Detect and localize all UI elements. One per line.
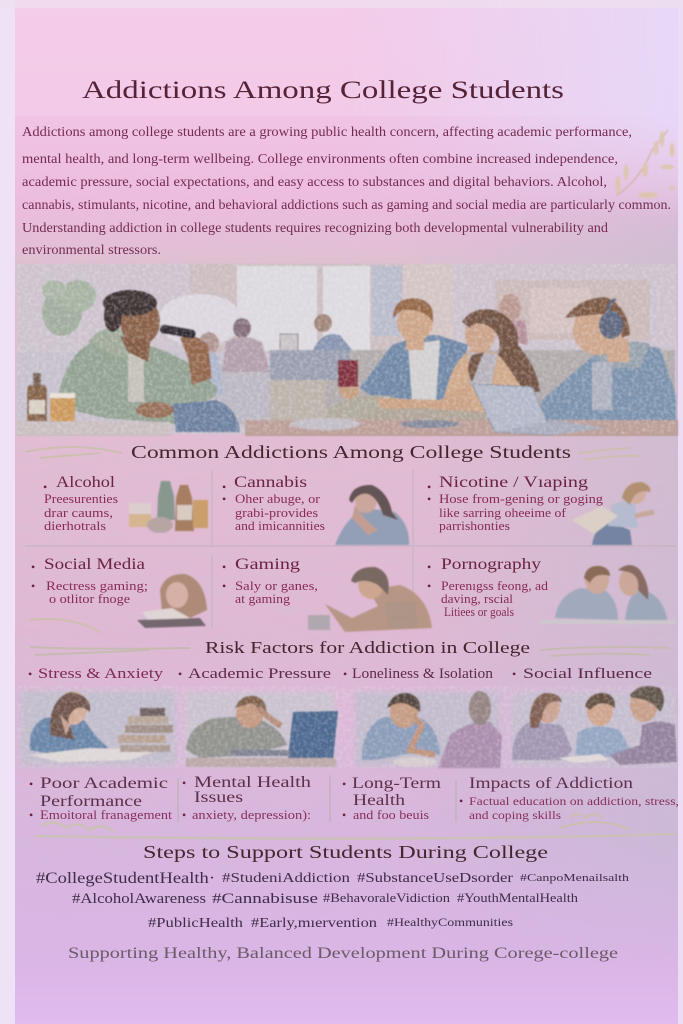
box: mental health issues: anxiety, depression): — [192, 808, 311, 822]
card: cannabis: Cannabis — [234, 474, 307, 491]
card: gaming: Gaming — [235, 556, 300, 573]
heading: risk factors: Risk Factors for Addiction in College — [205, 638, 530, 657]
card: nicotine vaping: • — [427, 492, 431, 506]
card: social media: • — [31, 560, 35, 574]
hashtags: #YouthMentalHealth — [457, 891, 579, 905]
intro paragraph — [22, 124, 671, 257]
heading: steps to support: Steps to Support Students During College — [143, 842, 548, 862]
card: gaming: • — [222, 560, 226, 574]
card: cannabis: • — [222, 480, 226, 494]
card: cannabis: • — [222, 492, 226, 506]
card: pornography: Pornography — [441, 556, 541, 573]
vignette: loneliness and isolation — [362, 691, 502, 768]
box: long-term health: and foo beuis — [353, 808, 429, 822]
hashtags: #StudeniAddiction — [222, 871, 350, 886]
flourish: lower left — [30, 619, 100, 632]
box: poor academic performance: • — [29, 808, 33, 822]
hashtags: #AlcoholAwareness — [72, 891, 206, 907]
box: mental health issues: Mental Health — [194, 774, 311, 791]
title: Addictions Among College Students — [82, 77, 564, 104]
card: social media: • — [31, 579, 35, 593]
box: poor academic performance: • — [29, 777, 33, 791]
box: poor academic performance: Poor Academic — [40, 775, 168, 792]
friend with cup — [325, 298, 468, 418]
heading: common addictions: Common Addictions Among College Students — [131, 442, 571, 462]
box: impacts of addiction — [459, 775, 679, 830]
flourish: heading left — [25, 447, 640, 460]
box: mental health issues: Issues — [194, 789, 243, 806]
card: alcohol: dierhotrals — [44, 519, 106, 533]
box: long-term health: Health — [353, 792, 405, 809]
card: cannabis: and imicannities — [235, 519, 325, 533]
risk factor labels: • — [512, 667, 516, 681]
hashtags: #CanpoMenailsalth — [520, 872, 630, 884]
illustration: students in lounge — [17, 264, 678, 436]
section: common addictions — [25, 442, 676, 632]
card: nicotine vaping: like sarring oheeime of — [439, 506, 567, 520]
box: impacts of addiction: Impacts of Addiction — [469, 775, 633, 792]
risk factor labels: Academic Pressure — [188, 666, 331, 682]
icon: girl reading — [137, 574, 207, 628]
icon: student thinking — [335, 485, 409, 545]
card: alcohol: drar caums, — [44, 506, 113, 520]
risk factor labels: Social Influence — [523, 666, 652, 682]
risk factor labels: Loneliness & Isolation — [352, 666, 494, 682]
dividers for impact boxes — [178, 775, 456, 822]
card: gaming: at gaming — [235, 592, 291, 606]
table and laptop — [245, 420, 678, 436]
box: poor academic performance: Performance — [40, 793, 142, 810]
box: long-term health: Long-Term — [352, 775, 441, 792]
flourish: bottom left — [35, 822, 676, 839]
card: nicotine vaping: Hose from-gening or goging — [439, 492, 604, 506]
card: alcohol: • — [43, 480, 47, 494]
card grid lines — [25, 470, 676, 628]
box: impacts of addiction: Factual education on addiction, stress, — [469, 794, 679, 808]
hashtags: #BehavoraleVidiction — [323, 891, 451, 905]
card: alcohol — [43, 474, 208, 533]
card: nicotine vaping: parrishonties — [439, 519, 510, 533]
card: cannabis — [222, 474, 409, 545]
closing tagline: Supporting Healthy, Balanced Development During Corege-college — [68, 945, 618, 962]
risk factor labels — [28, 666, 652, 682]
box: impacts of addiction: • — [459, 794, 463, 808]
card: social media: o otlitor fnoge — [49, 592, 131, 606]
risk factor labels: • — [343, 667, 347, 681]
card: social media: Social Media — [44, 556, 145, 573]
card: alcohol: Preesurenties — [44, 492, 118, 506]
intro paragraph: environmental stressors. — [22, 242, 161, 257]
card: nicotine vaping: Nicotine / Vıaping — [439, 474, 588, 491]
risk factor labels: • — [28, 667, 32, 681]
card: gaming — [222, 556, 432, 632]
hashtags: #HealthyCommunities — [387, 915, 513, 929]
intro paragraph: mental health, and long-term wellbeing. College environments often combine increased independence, — [22, 151, 618, 166]
vignette: social influence — [512, 686, 677, 765]
icon: student gaming — [308, 567, 432, 632]
box: mental health issues: • — [182, 808, 186, 822]
risk factor labels: • — [178, 667, 182, 681]
intro paragraph: Addictions among college students are a growing public health concern, affecting academic performance, — [22, 124, 632, 139]
card: gaming: Saly or ganes, — [235, 579, 318, 593]
risk factor labels: Stress & Anxiety — [38, 666, 164, 682]
woman — [358, 309, 540, 424]
box: long-term health: • — [342, 777, 346, 791]
vignette: academic pressure — [186, 696, 338, 767]
card: pornography: Perenıgss feong, ad — [441, 579, 549, 593]
icon: bottles and glasses — [129, 481, 208, 533]
card: nicotine vaping — [427, 474, 654, 545]
card: nicotine vaping: • — [427, 480, 431, 494]
intro paragraph: cannabis, stimulants, nicotine, and behavioral addictions such as gaming and social media are particularly common. — [22, 197, 671, 212]
box: poor academic performance — [29, 775, 173, 822]
card: social media: Rectress gaming; — [46, 579, 148, 593]
card: pornography: • — [427, 560, 431, 574]
intro paragraph: Understanding addiction in college students requires recognizing both developmental vulnerability and — [22, 220, 608, 235]
box: impacts of addiction: and coping skills — [469, 808, 561, 822]
flourish: risk heading — [30, 647, 670, 656]
card: cannabis: Oher abuge, or — [235, 492, 321, 506]
box: long-term health: • — [342, 808, 346, 822]
hashtags: #PublicHealth — [148, 915, 243, 930]
card: alcohol: Alcohol — [56, 474, 116, 491]
intro paragraph: academic pressure, social expectations, and easy access to substances and digital behaviors. Alcohol, — [22, 174, 607, 189]
card: pornography: daving, rscial — [441, 592, 514, 606]
section: risk factors — [17, 638, 679, 839]
icon: running student — [572, 482, 654, 545]
hashtags: #Cannabisuse — [212, 891, 318, 907]
hashtags: #CollegeStudentHealth· — [36, 870, 215, 887]
card: gaming: • — [222, 579, 226, 593]
box: mental health issues — [182, 774, 311, 822]
box: long-term health — [342, 775, 441, 822]
box: poor academic performance: Emoitoral franagement — [40, 808, 173, 822]
man with headphones — [538, 297, 676, 428]
vignette: stress and anxiety — [30, 691, 173, 762]
hashtags: #SubstanceUseDsorder — [357, 871, 513, 886]
card: cannabis: grabi-provides — [235, 506, 318, 520]
card: social media — [31, 556, 207, 628]
flourish: impact box — [560, 814, 630, 830]
icon: couple talking — [540, 565, 675, 624]
hashtags — [36, 870, 630, 930]
card: pornography — [427, 556, 675, 624]
box: mental health issues: • — [182, 776, 186, 790]
illustration: risk factor vignettes — [17, 686, 677, 768]
card: pornography: Litiees or goals — [444, 605, 514, 619]
icon: leaf sprig — [616, 130, 675, 198]
hashtags: #Early,mıervention — [251, 915, 377, 930]
man drinking — [27, 290, 240, 432]
card: pornography: • — [427, 579, 431, 593]
